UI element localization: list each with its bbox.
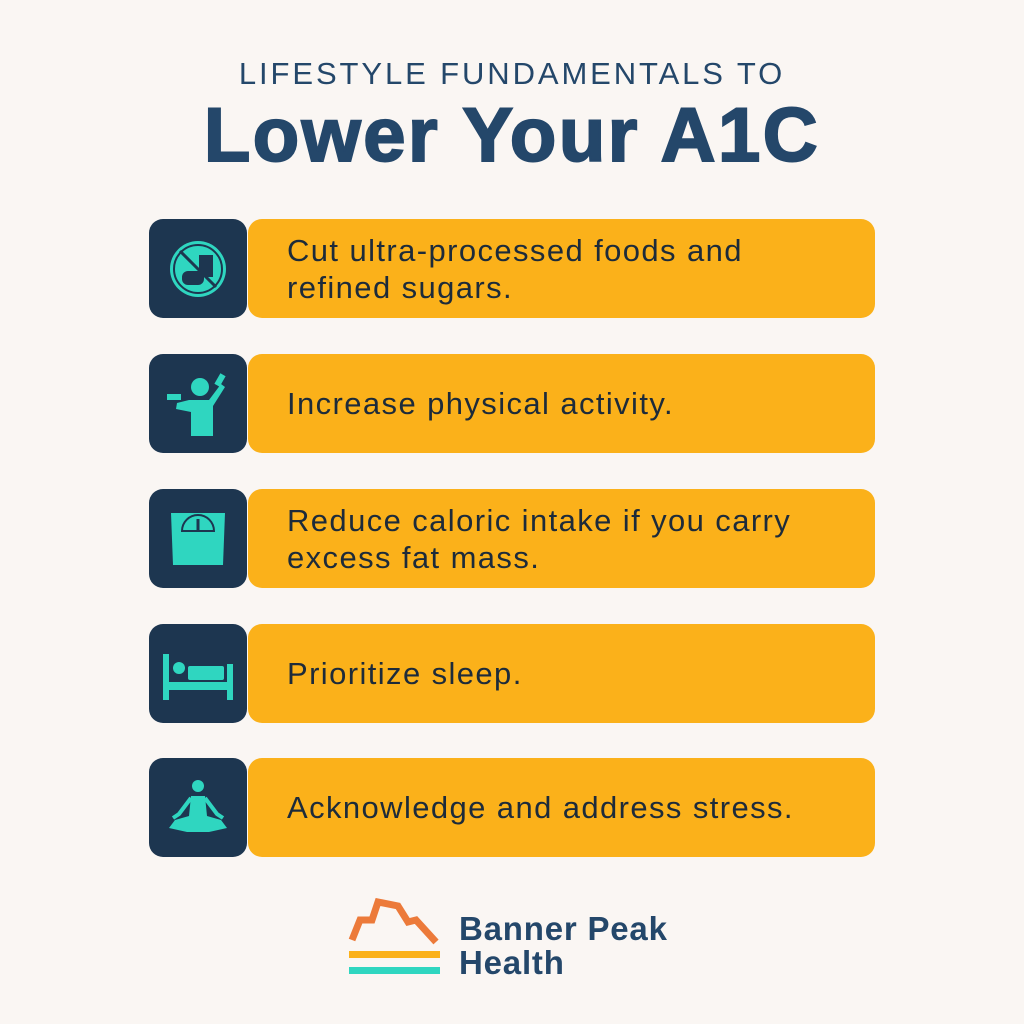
row: processed foods: [149, 219, 875, 318]
icon: dumbbell person: [149, 354, 247, 453]
subtitle: LIFESTYLE FUNDAMENTALS TO: [239, 56, 785, 91]
text: Acknowledge and address stress.: [287, 790, 794, 825]
row: activity: [149, 354, 875, 453]
text: refined sugars.: [287, 270, 513, 304]
logo text: Health: [459, 944, 565, 981]
text: [248, 489, 875, 588]
row: sleep: [149, 624, 875, 723]
text: Cut ultra-processed foods and: [287, 232, 743, 268]
text: Reduce caloric intake if you carry: [287, 502, 791, 538]
logo: [348, 898, 668, 981]
text: [248, 354, 875, 453]
logo mark: [348, 898, 440, 974]
row: calories: [149, 489, 875, 588]
logo text: Banner Peak: [459, 910, 668, 947]
text: Prioritize sleep.: [287, 656, 523, 691]
icon: bed: [149, 624, 247, 723]
icon: no fast food: [149, 219, 247, 318]
row: stress: [149, 758, 875, 857]
text: [248, 624, 875, 723]
icon: scale: [149, 489, 247, 588]
icon: meditation: [149, 758, 247, 857]
title: Lower Your A1C: [204, 93, 820, 178]
text: [248, 219, 875, 318]
text: excess fat mass.: [287, 540, 540, 574]
logo text: [459, 910, 668, 981]
text: Increase physical activity.: [287, 386, 674, 421]
text: [248, 758, 875, 857]
